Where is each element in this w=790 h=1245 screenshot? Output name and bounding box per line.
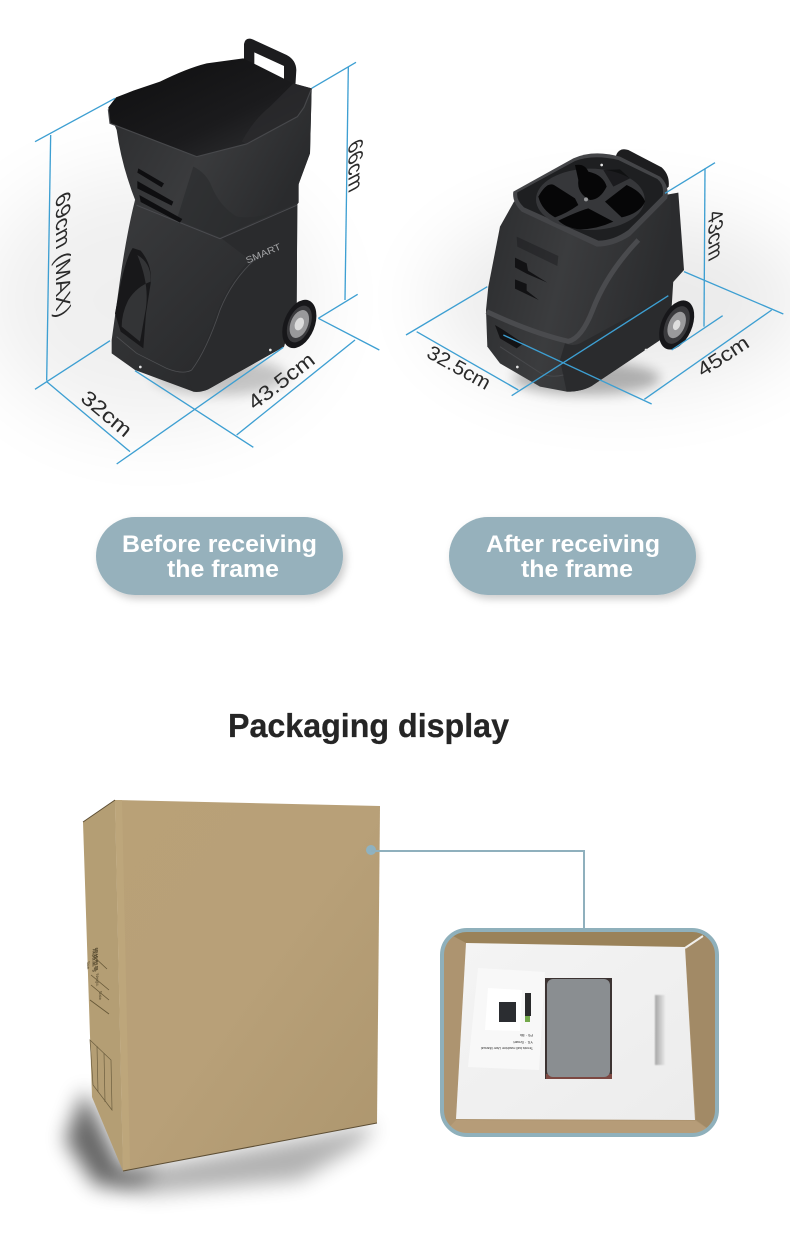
ball wheel inside opening — [122, 255, 151, 342]
side body panel — [560, 295, 670, 392]
manual text: P5 · Bk — [520, 1033, 533, 1038]
inset photo: box contents — [442, 930, 717, 1135]
body curve highlight — [117, 255, 260, 372]
box side print: Weight — [95, 972, 100, 988]
label: 69cm (MAX): 69cm (MAX) — [51, 187, 75, 322]
body band — [487, 240, 638, 341]
instruction manual: Tennis ball machine User Manual — [481, 1046, 533, 1050]
box side print — [86, 946, 103, 1002]
flap tape — [685, 936, 703, 948]
side slots — [137, 168, 182, 223]
machine shadow — [153, 358, 287, 395]
connector from box to inset — [366, 845, 584, 929]
bucket inner wall — [242, 83, 312, 144]
label: 66cm: 66cm — [344, 134, 367, 196]
pill: after receiving the frame — [449, 517, 696, 595]
inset frame — [442, 930, 717, 1135]
cardboard flaps — [454, 932, 706, 947]
screw dots — [139, 349, 272, 368]
machine rear panel — [653, 193, 684, 298]
bucket outer shell — [108, 88, 312, 237]
top plate inset — [517, 157, 663, 241]
bucket rim — [108, 88, 312, 157]
machine shadow — [513, 362, 660, 395]
box side print: 规格型号 — [91, 946, 100, 974]
instruction manual: YS · Smart — [513, 1040, 533, 1045]
machine wheel — [652, 295, 701, 355]
box handling icons — [90, 1040, 112, 1110]
lower bucket fold — [177, 167, 297, 237]
box side print rules — [90, 955, 109, 1014]
machine body — [486, 163, 673, 392]
dimension lines — [406, 163, 783, 404]
box front face — [115, 800, 380, 1171]
bucket interior — [108, 58, 312, 157]
box edge lines — [83, 800, 377, 1171]
left machine with dimension lines, before receiving the frame — [35, 39, 379, 464]
body side panel — [185, 205, 297, 392]
lower opening — [495, 325, 523, 348]
fabric pouch — [545, 978, 612, 1079]
screw dots — [516, 164, 647, 368]
right machine with dimension lines, after receiving the frame — [406, 149, 783, 404]
pill: after receiving the frame: After receiving — [486, 531, 660, 558]
machine wheel — [276, 295, 323, 353]
pill: after receiving the frame: the frame — [521, 556, 633, 583]
dimension lines — [35, 62, 379, 464]
pill: before receiving the frame: the frame — [167, 556, 279, 583]
label: 32.5cm: 32.5cm — [423, 342, 494, 395]
pill: before receiving the frame — [96, 517, 343, 595]
pill: before receiving the frame: Before receiving — [122, 531, 317, 558]
protective foam — [456, 943, 695, 1120]
side slots — [515, 237, 558, 300]
foam accessory slot — [655, 995, 665, 1065]
funnel hub — [584, 197, 588, 201]
box side print: Date — [98, 990, 103, 1002]
instruction manual — [481, 988, 538, 1070]
cardboard box — [83, 800, 380, 1171]
lower front curve — [500, 347, 563, 376]
box side print: Size — [86, 960, 91, 971]
machine rear panel — [280, 88, 312, 210]
lower machine body — [112, 200, 297, 392]
funnel disc — [536, 169, 645, 230]
label: 43.5cm: 43.5cm — [244, 348, 319, 415]
box edge shading — [115, 800, 130, 1171]
machine handle — [613, 149, 669, 192]
heading: packaging display: Packaging display — [228, 707, 510, 744]
funnel petals — [538, 165, 645, 229]
top plate rim — [513, 153, 668, 247]
box left face — [83, 800, 123, 1171]
label: 32cm: 32cm — [76, 386, 136, 442]
label: 43cm: 43cm — [704, 204, 727, 265]
label: 45cm: 45cm — [693, 332, 753, 382]
machine handle — [244, 39, 296, 87]
waist band highlight — [137, 205, 297, 239]
brand label: SMART — [244, 242, 283, 266]
ball outlet opening — [115, 248, 151, 348]
